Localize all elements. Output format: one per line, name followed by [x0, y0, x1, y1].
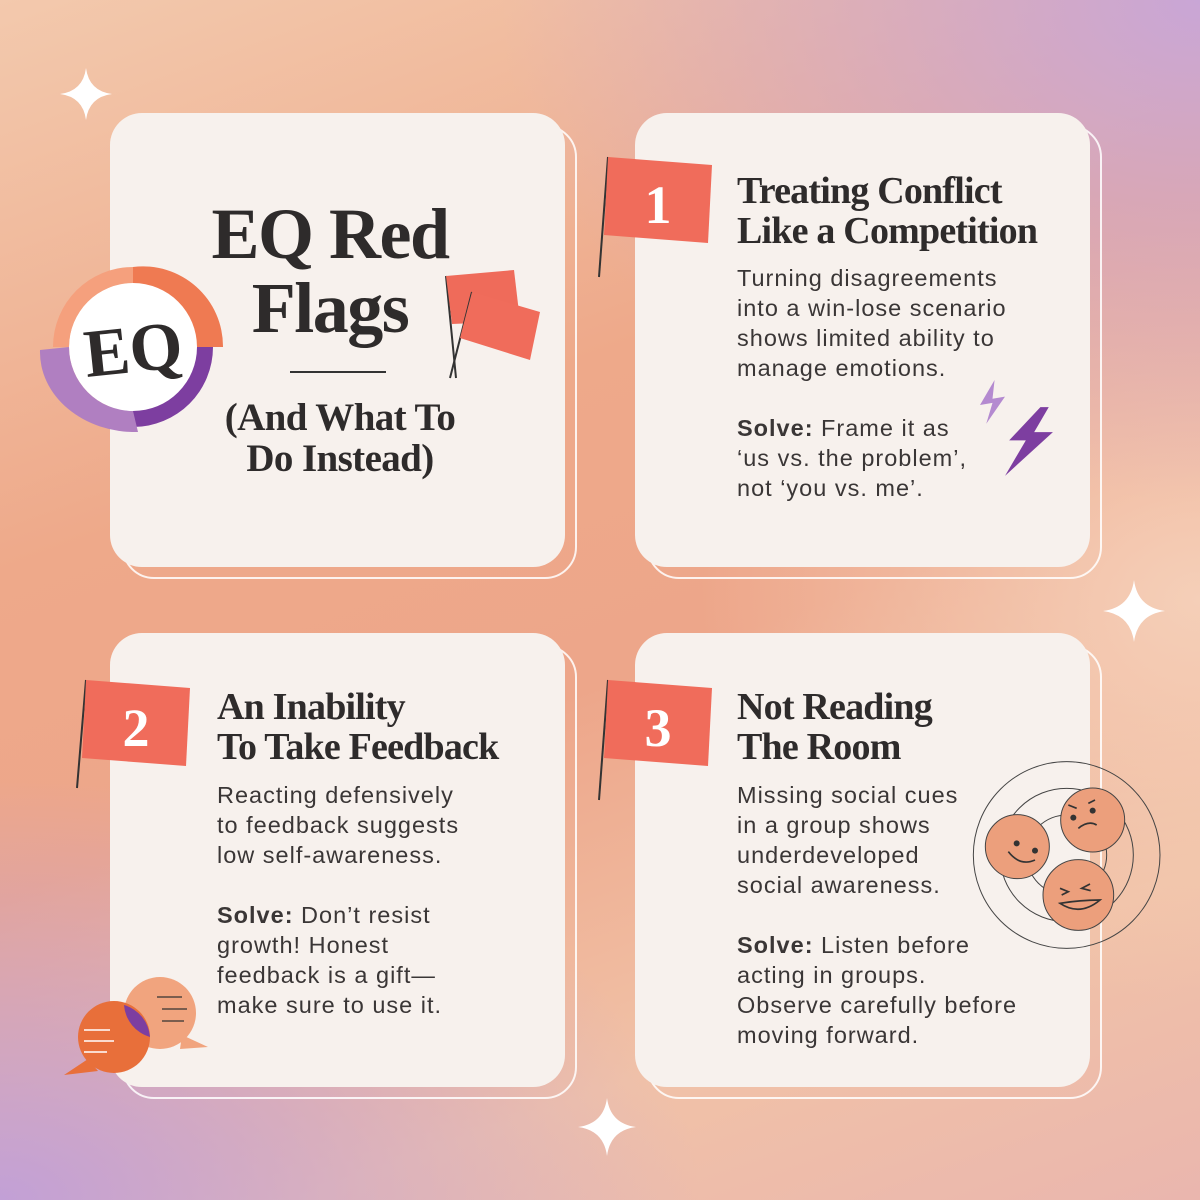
- icon: EQ logo: [40, 266, 223, 432]
- heading 2: [217, 686, 500, 768]
- heading 2: An Inability: [217, 686, 405, 728]
- solve 3: moving forward.: [737, 1022, 919, 1048]
- heading 1: Treating Conflict: [737, 170, 1002, 212]
- icon: lightning: [980, 380, 1053, 476]
- solve 2: [217, 902, 442, 1018]
- heading: EQ Red Flags: [211, 194, 450, 348]
- text 2: low self-awareness.: [217, 842, 442, 868]
- heading: EQ Red Flags: EQ Red: [211, 194, 449, 274]
- panel: 1 conflict: [635, 113, 1090, 567]
- text 2: [217, 782, 459, 868]
- solve 3: acting in groups.: [737, 962, 926, 988]
- solve 1: not ‘you vs. me’.: [737, 475, 924, 501]
- text 1: shows limited ability to: [737, 325, 995, 351]
- solve 2: feedback is a gift—: [217, 962, 436, 988]
- solve 3: [737, 932, 1017, 1048]
- text 3: in a group shows: [737, 812, 931, 838]
- text 3: underdeveloped: [737, 842, 920, 868]
- flag 2: [76, 680, 190, 788]
- text 1: Turning disagreements: [737, 265, 997, 291]
- solve 1: [737, 415, 967, 501]
- solve 2: growth! Honest: [217, 932, 389, 958]
- sparkle bottom: [578, 1098, 636, 1156]
- icon: EQ logo: EQ: [80, 306, 186, 392]
- solve 1: Solve: Frame it as: [737, 415, 950, 441]
- text 3: social awareness.: [737, 872, 941, 898]
- flag 3: [598, 680, 712, 800]
- icon: crossed flags: [445, 270, 540, 378]
- panel: title: [110, 113, 565, 567]
- text 1: [737, 265, 1007, 381]
- heading 1: [737, 170, 1038, 252]
- flag 2: 2: [122, 698, 150, 758]
- flag 1: 1: [644, 175, 672, 235]
- icon: faces in circles: [972, 761, 1160, 949]
- heading 1: Like a Competition: [737, 210, 1037, 252]
- text 2: to feedback suggests: [217, 812, 459, 838]
- text 1: manage emotions.: [737, 355, 946, 381]
- subtitle: (And What To: [225, 396, 455, 439]
- sparkle top-left: [60, 68, 112, 120]
- solve 3: Observe carefully before: [737, 992, 1017, 1018]
- text 2: Reacting defensively: [217, 782, 454, 808]
- solve 2: make sure to use it.: [217, 992, 442, 1018]
- text 1: into a win-lose scenario: [737, 295, 1007, 321]
- heading 3: The Room: [737, 726, 901, 768]
- panel: 2 feedback: [110, 633, 565, 1087]
- flag 3: 3: [644, 698, 672, 758]
- panel: 3 room: [635, 633, 1090, 1087]
- heading 3: [737, 686, 932, 768]
- sparkle right: [1104, 580, 1164, 642]
- text 3: [737, 782, 958, 898]
- solve 2: Solve: Don’t resist: [217, 902, 431, 928]
- solve 3: Solve: Listen before: [737, 932, 970, 958]
- heading 3: Not Reading: [737, 686, 932, 728]
- subtitle: Do Instead): [246, 437, 434, 480]
- solve 1: ‘us vs. the problem’,: [737, 445, 967, 471]
- flag 1: [598, 156, 712, 278]
- subtitle: [225, 396, 455, 480]
- icon: speech bubbles: [64, 977, 208, 1075]
- heading: EQ Red Flags: Flags: [252, 268, 408, 348]
- text 3: Missing social cues: [737, 782, 958, 808]
- heading 2: To Take Feedback: [217, 726, 498, 768]
